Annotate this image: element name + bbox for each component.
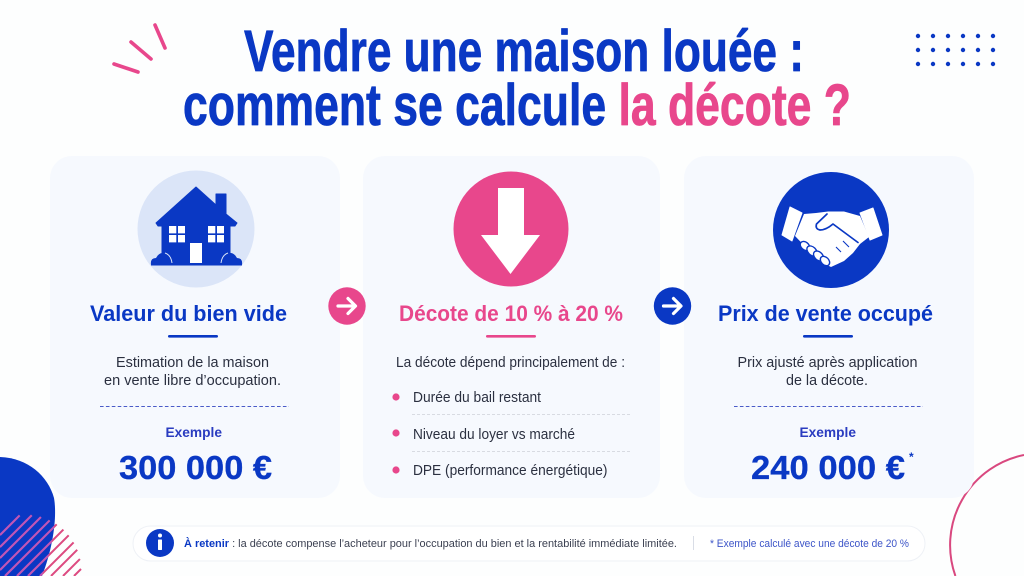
decoration: pink spark lines xyxy=(114,25,165,72)
title xyxy=(183,19,851,138)
description: Estimation de la maison xyxy=(116,355,269,371)
description xyxy=(738,355,918,389)
example value: 300 000 € xyxy=(119,449,272,486)
title: Vendre une maison louée : xyxy=(244,19,804,84)
dashed separator xyxy=(734,406,923,408)
description: en vente libre d’occupation. xyxy=(104,373,281,389)
callout text: À retenir : la décote compense l’acheteur pour l’occupation du bien et la rentabilité immédiate limitée. xyxy=(184,537,677,550)
heading underline xyxy=(803,335,853,338)
icon: house xyxy=(138,170,254,288)
footnote: * Exemple calculé avec une décote de 20 % xyxy=(710,538,909,550)
dashed separator xyxy=(100,406,289,408)
description xyxy=(104,355,281,389)
heading: Prix de vente occupé xyxy=(718,301,933,326)
description: de la décote. xyxy=(786,373,868,389)
example label: Exemple xyxy=(166,424,222,440)
heading underline xyxy=(486,335,536,338)
icon: down arrow xyxy=(454,172,568,286)
description: Prix ajusté après application xyxy=(738,355,918,371)
example label: Exemple xyxy=(800,424,856,440)
example value: 240 000 € xyxy=(751,449,905,486)
heading underline xyxy=(168,335,218,338)
callout: à retenir xyxy=(133,526,925,561)
panel: valeur du bien vide xyxy=(50,156,340,498)
factor list: DPE (performance énergétique) xyxy=(413,463,608,479)
arrow: pink step connector xyxy=(328,287,366,325)
factor list: Durée du bail restant xyxy=(413,390,541,406)
panel: décote xyxy=(363,156,660,498)
decoration: bottom-right ring xyxy=(950,455,1024,576)
heading: Valeur du bien vide xyxy=(90,301,287,326)
title: comment se calcule la décote ? xyxy=(183,73,851,138)
icon: info xyxy=(146,529,174,557)
decoration: dot grid xyxy=(916,34,995,66)
factor list: Niveau du loyer vs marché xyxy=(413,427,575,443)
factor list xyxy=(392,390,630,479)
heading: Décote de 10 % à 20 % xyxy=(399,301,623,326)
panel: prix de vente occupé xyxy=(684,156,974,498)
intro text: La décote dépend principalement de : xyxy=(396,355,625,371)
decoration: bottom-left circles xyxy=(0,457,81,576)
example value: * xyxy=(909,450,914,464)
arrow: blue step connector xyxy=(654,287,691,325)
icon: handshake xyxy=(773,172,889,288)
